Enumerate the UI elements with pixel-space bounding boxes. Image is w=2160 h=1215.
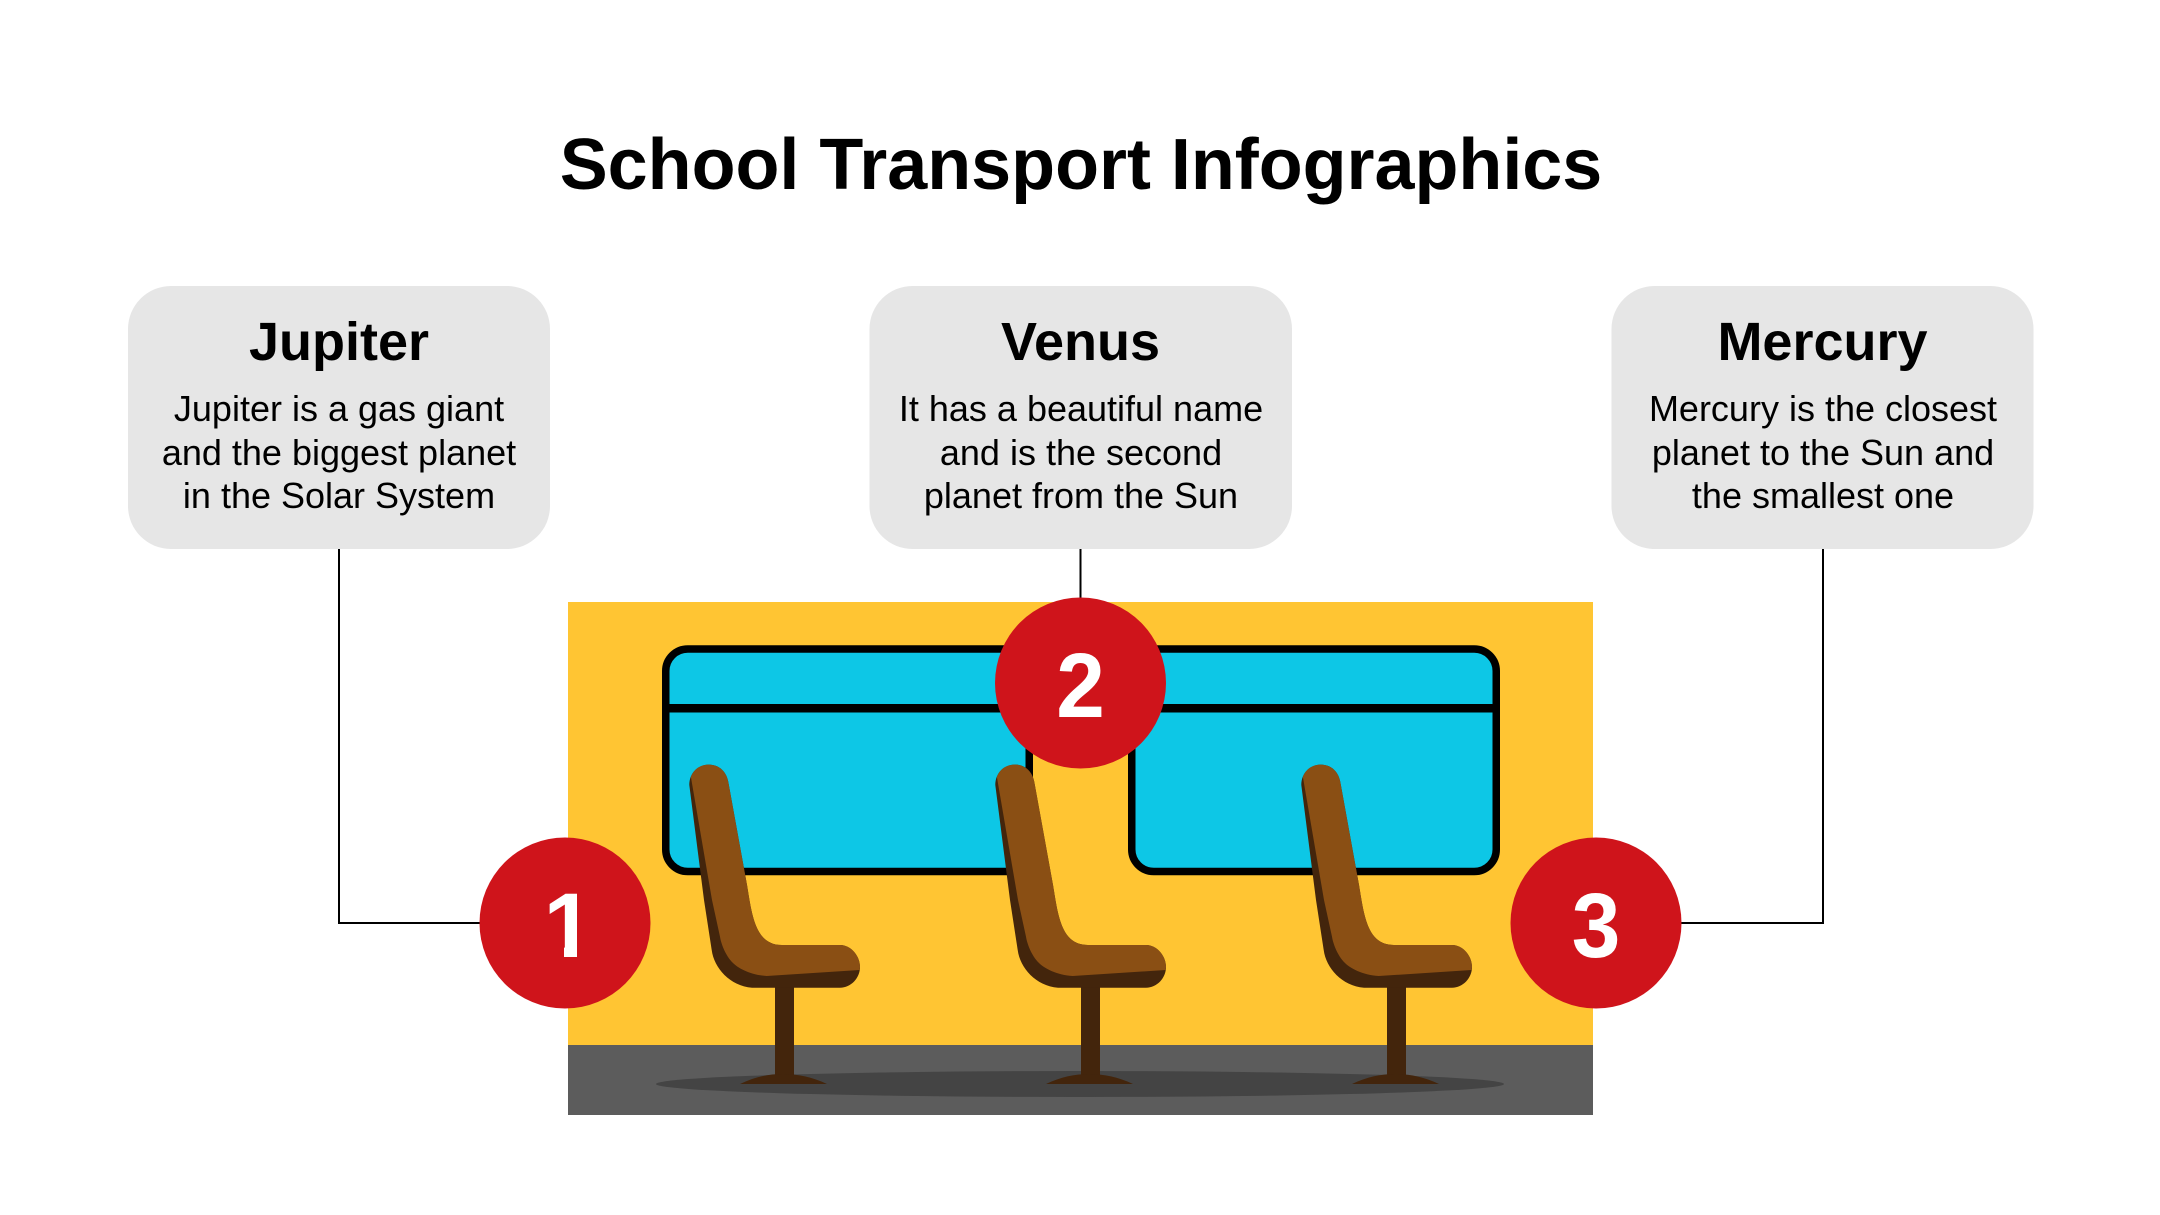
floor shadow: [656, 1071, 1504, 1097]
text: Mercury description: Mercury is the closest: [1649, 388, 1997, 429]
title: School Transport Infographics: [560, 125, 1602, 205]
panel: Mercury card: [1612, 286, 2034, 549]
marker 1: [480, 838, 650, 1008]
connector: card 3 to marker 3: [1590, 549, 1823, 923]
right window: [1132, 649, 1496, 872]
seat 1: [689, 765, 860, 1084]
text: Mercury description: the smallest one: [1692, 475, 1954, 516]
seat 2: [995, 765, 1166, 1084]
text: Venus description: and is the second: [940, 432, 1222, 473]
left window: [666, 649, 1029, 872]
heading: Venus: Venus: [1001, 312, 1160, 372]
marker 2: 2: [1056, 635, 1105, 738]
text: Venus description: It has a beautiful name: [899, 388, 1263, 429]
text: Jupiter description: in the Solar System: [183, 475, 495, 516]
marker 2: [995, 598, 1166, 768]
text: Venus description: planet from the Sun: [924, 475, 1238, 516]
marker 3: 3: [1572, 875, 1620, 978]
seat 3: [1301, 765, 1472, 1084]
text: Mercury description: planet to the Sun and: [1652, 432, 1994, 473]
bus wall: [568, 602, 1593, 1045]
panel: Venus card: [870, 286, 1292, 549]
text: Jupiter description: Jupiter is a gas giant: [174, 388, 504, 429]
bus floor: [568, 1045, 1593, 1115]
connector: card 1 to marker 1: [339, 549, 570, 923]
text: Jupiter description: and the biggest planet: [162, 432, 516, 473]
connector: card 2 to marker 2: [1080, 549, 1082, 610]
marker 1: 1: [543, 875, 595, 977]
marker 3: [1510, 838, 1682, 1008]
heading: Jupiter: Jupiter: [249, 312, 429, 372]
heading: Mercury: Mercury: [1717, 312, 1928, 372]
panel: Jupiter card: [128, 286, 550, 549]
illustration: bus interior: [568, 602, 1593, 1115]
